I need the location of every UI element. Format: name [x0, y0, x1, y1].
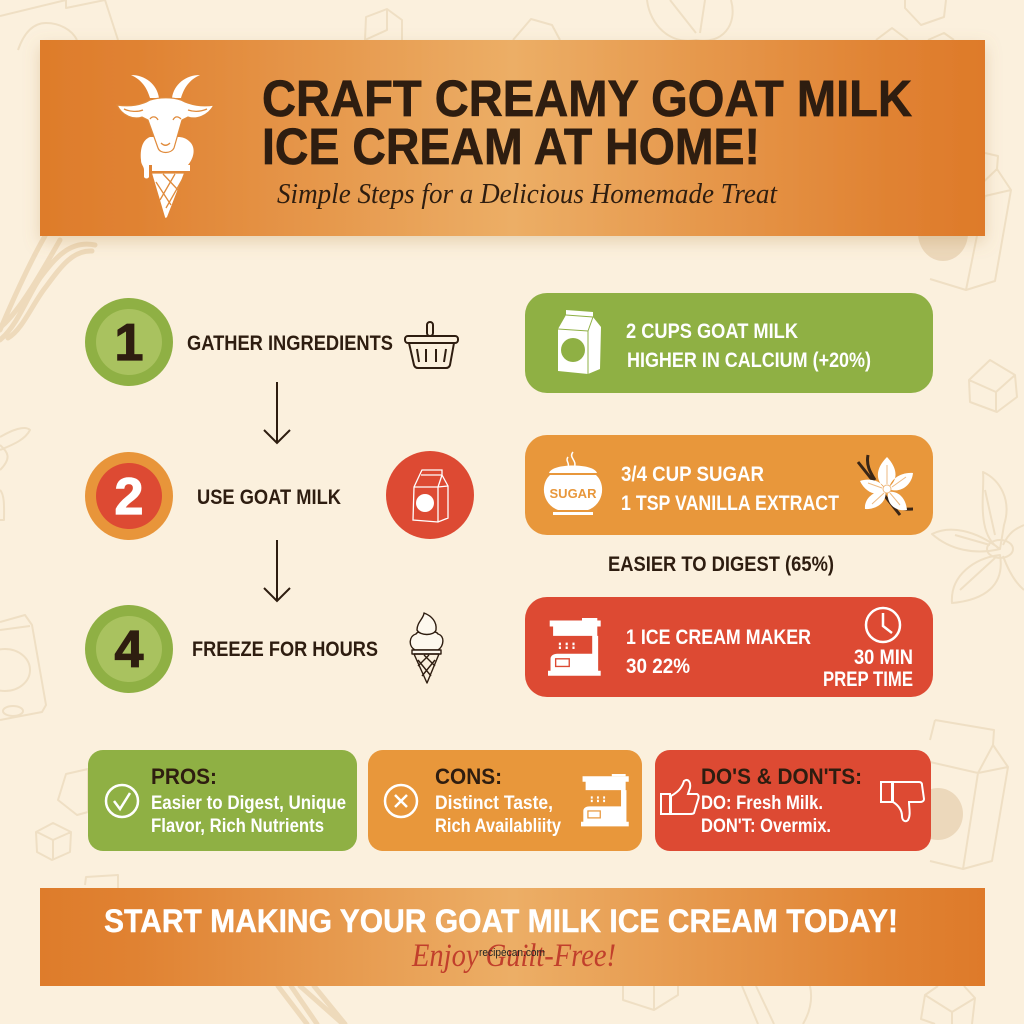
panel: cons	[368, 750, 642, 851]
footer heading: START MAKING YOUR GOAT MILK ICE CREAM TODAY!	[104, 903, 898, 939]
panel: ice cream maker: 30 22%	[626, 655, 690, 678]
footer tagline: Enjoy Guilt-Free!	[411, 938, 616, 974]
icon: basket	[405, 322, 458, 368]
icon: thumbs down	[881, 782, 924, 821]
panel: cons: Rich Availabliity	[435, 816, 561, 837]
panel: dos and donts: DON'T: Overmix.	[701, 816, 831, 837]
panel: cons: CONS:	[435, 764, 502, 789]
step 2	[85, 451, 474, 540]
panel: goat milk: 2 CUPS GOAT MILK	[626, 320, 798, 343]
step 4	[85, 605, 443, 693]
panel: dos and donts	[655, 750, 931, 851]
panel: pros: Flavor, Rich Nutrients	[151, 816, 324, 837]
title heading: CRAFT CREAMY GOAT MILK	[262, 70, 912, 127]
icon: sugar bowl	[544, 452, 602, 515]
watermark: recipecan.com	[479, 947, 545, 959]
panel: pros: PROS:	[151, 764, 217, 789]
panel: ice cream maker: 30 MIN	[854, 646, 913, 669]
panel: ice cream maker	[525, 597, 933, 697]
title heading: ICE CREAM AT HOME!	[262, 118, 760, 175]
footer banner	[40, 888, 985, 986]
icon: goat with ice cream cone	[117, 75, 214, 218]
step 4: 4	[115, 621, 144, 679]
icon: x circle	[385, 785, 417, 817]
icon: clock	[866, 608, 900, 642]
panel: pros: Easier to Digest, Unique	[151, 793, 346, 814]
icon: thumbs up	[661, 780, 699, 814]
icon: vanilla flower	[858, 455, 913, 515]
panel: ice cream maker: 1 ICE CREAM MAKER	[626, 626, 811, 649]
subtitle: Simple Steps for a Delicious Homemade Treat	[277, 178, 778, 210]
panel: goat milk	[525, 293, 933, 393]
icon: ice cream cone	[410, 613, 443, 683]
panel: cons: Distinct Taste,	[435, 793, 553, 814]
panel: sugar and vanilla	[525, 435, 933, 535]
step 1: 1	[115, 314, 143, 372]
arrow 1 to 2	[264, 382, 290, 443]
panel: sugar and vanilla: 3/4 CUP SUGAR	[621, 463, 764, 486]
callout: easier to digest: EASIER TO DIGEST (65%)	[608, 553, 834, 576]
panel: ice cream maker: PREP TIME	[823, 668, 913, 691]
icon: check circle	[106, 785, 138, 817]
icon: milk carton on red circle	[386, 451, 474, 539]
panel: goat milk: HIGHER IN CALCIUM (+20%)	[627, 349, 871, 372]
title heading	[262, 70, 912, 175]
icon: milk carton	[558, 310, 601, 374]
step 2: USE GOAT MILK	[197, 486, 341, 509]
panel: pros	[88, 750, 357, 851]
step 1	[85, 298, 458, 386]
panel: dos and donts: DO'S & DON'TS:	[701, 764, 862, 789]
step 4: FREEZE FOR HOURS	[192, 638, 378, 661]
step 2: 2	[115, 468, 143, 526]
icon: sugar bowl: SUGAR	[550, 486, 597, 501]
arrow 2 to 4	[264, 540, 290, 601]
panel: dos and donts: DO: Fresh Milk.	[701, 793, 823, 814]
panel: sugar and vanilla: 1 TSP VANILLA EXTRACT	[621, 492, 839, 515]
icon: ice cream maker	[548, 618, 601, 676]
step 1: GATHER INGREDIENTS	[187, 332, 393, 355]
title banner	[40, 40, 985, 236]
icon: ice cream maker small	[581, 774, 629, 826]
